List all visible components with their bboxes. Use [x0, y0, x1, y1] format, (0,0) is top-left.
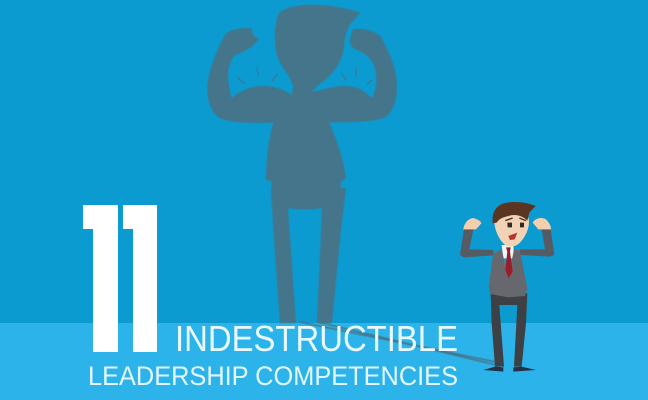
mouth — [508, 233, 517, 240]
legs — [491, 293, 527, 367]
flex marks on the shadow — [237, 67, 372, 84]
shadow lines on floor — [300, 322, 496, 365]
eyebrows — [505, 218, 526, 221]
number 11 — [83, 205, 157, 352]
floor — [0, 323, 648, 400]
shadow silhouette of muscular figure — [207, 5, 397, 323]
cartoon businessman — [460, 202, 554, 372]
shoes — [483, 367, 536, 372]
arms — [460, 229, 493, 257]
face — [494, 213, 529, 247]
tie — [505, 247, 513, 278]
eyes — [507, 223, 524, 227]
fists — [463, 218, 481, 229]
heading: indestructible: INDESTRUCTIBLE — [175, 318, 458, 359]
shirt — [502, 245, 514, 258]
jacket — [489, 249, 527, 297]
heading: leadership competencies: LEADERSHIP COMPETENCIES — [88, 361, 458, 391]
hair — [492, 202, 536, 223]
